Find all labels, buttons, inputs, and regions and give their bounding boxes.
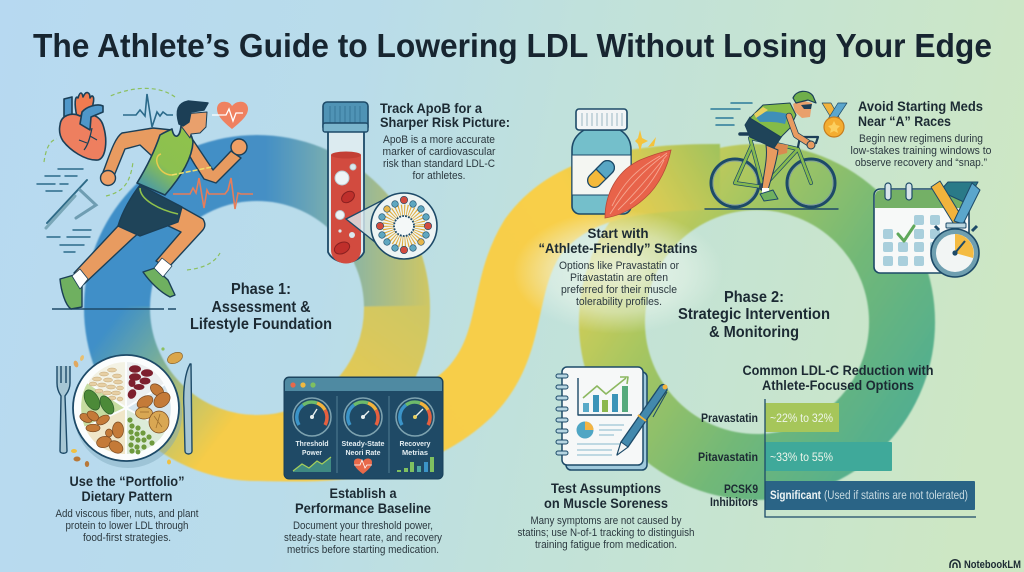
body text: protein to lower LDL through	[66, 520, 188, 532]
body text	[56, 508, 199, 544]
bar labels: PCSK9	[724, 482, 758, 496]
icon: knife	[184, 364, 192, 454]
figure: runner	[60, 101, 247, 309]
panel: athlete-friendly statins	[538, 109, 698, 308]
body text: Options like Pravastatin or	[559, 260, 679, 272]
heading	[70, 473, 184, 504]
body text	[850, 133, 992, 169]
heading: Track ApoB for a	[380, 100, 482, 116]
heading: phase 1: Phase 1:	[231, 281, 291, 298]
title: The Athlete’s Guide to Lowering LDL Without Losing Your Edge	[33, 28, 992, 65]
chart title	[742, 362, 934, 393]
body text: Many symptoms are not caused by	[530, 515, 682, 527]
heading: Use the “Portfolio”	[70, 473, 184, 489]
body text	[559, 260, 679, 308]
panel: performance baseline	[284, 377, 443, 556]
body text: food-first strategies.	[83, 532, 171, 544]
icon: orange ECG line	[173, 178, 253, 209]
heading: Start with	[588, 225, 648, 241]
heading: Sharper Risk Picture:	[380, 114, 510, 130]
bar: pravastatin	[765, 403, 839, 432]
heading: Performance Baseline	[295, 500, 431, 516]
bar: PCSK9 inhibitors: Significant	[770, 490, 821, 502]
bar: pitavastatin: ~33% to 55%	[770, 452, 833, 464]
heading	[295, 485, 431, 516]
panel: avoid meds near races	[705, 91, 992, 277]
bar chart: LDL-C reduction	[698, 362, 976, 517]
icon: anatomical heart	[59, 93, 106, 160]
heading	[858, 98, 983, 129]
body text	[382, 134, 496, 182]
bar: PCSK9 inhibitors	[765, 481, 975, 510]
bar: pravastatin: ~22% to 32%	[770, 413, 833, 425]
body text: risk than standard LDL-C	[383, 158, 495, 170]
heading: Near “A” Races	[858, 113, 951, 129]
body text: Add viscous fiber, nuts, and plant	[56, 508, 199, 520]
body text: steady-state heart rate, and recovery	[284, 532, 442, 544]
heading	[544, 480, 668, 511]
ground line	[52, 308, 176, 310]
body text: Begin new regimens during	[859, 133, 983, 145]
icon: dashboard window: Power	[302, 450, 322, 457]
bar labels: Inhibitors	[710, 495, 758, 509]
body text: ApoB is a more accurate	[383, 134, 495, 146]
icon: notebook with pen	[556, 367, 668, 470]
S-curve path: phase 1 and phase 2 rings	[117, 168, 902, 467]
icon: dashboard window	[284, 377, 443, 479]
heading	[538, 225, 698, 256]
icon: dashboard window: Recovery	[400, 441, 431, 448]
heading: phase 2: Strategic Intervention	[678, 306, 830, 323]
body text	[518, 515, 694, 551]
panel: track ApoB	[323, 100, 510, 264]
icon: dashboard window: Neori Rate	[346, 450, 381, 457]
icon: dashed recovery arrows	[44, 88, 220, 270]
body text: preferred for their muscle	[561, 284, 677, 296]
icon: calendar with stopwatch and ribbon	[874, 181, 980, 277]
heading: phase 2: Phase 2:	[724, 289, 784, 306]
heading: phase 1: Assessment &	[212, 299, 310, 316]
icon: pill bottle	[572, 109, 656, 214]
icon: dashboard window: Steady-State	[342, 441, 385, 448]
body text: observe recovery and “snap.”	[855, 157, 987, 169]
heading: Avoid Starting Meds	[858, 98, 983, 114]
heading: Dietary Pattern	[82, 488, 172, 504]
heading: phase 2: & Monitoring	[709, 324, 799, 341]
icon: fork	[57, 366, 70, 453]
icon: muscle	[605, 150, 671, 218]
body text: low-stakes training windows to	[850, 145, 992, 157]
body text	[284, 520, 442, 556]
panel: muscle soreness	[518, 367, 694, 551]
body text: for athletes.	[412, 170, 466, 182]
body text: Pitavastatin are often	[570, 272, 668, 284]
icon: ECG line dark	[123, 94, 173, 127]
heading: phase 1: Lifestyle Foundation	[190, 316, 332, 333]
illustration: runner with heart	[37, 88, 253, 309]
figure: cyclist	[705, 91, 838, 209]
heading: phase 2	[678, 289, 830, 341]
icon: plate with food	[71, 347, 184, 468]
body text: marker of cardiovascular	[382, 146, 496, 158]
icon: blood test tube	[323, 102, 368, 264]
bar labels: Pitavastatin	[698, 450, 758, 464]
body text: tolerability profiles.	[576, 296, 662, 308]
body text: Document your threshold power,	[293, 520, 433, 532]
body text: metrics before starting medication.	[287, 544, 439, 556]
heading: “Athlete-Friendly” Statins	[538, 240, 698, 256]
body text: training fatigue from medication.	[535, 539, 677, 551]
heading: Test Assumptions	[551, 480, 661, 496]
bar: pitavastatin	[765, 442, 892, 471]
icon: dashboard window: Metrias	[402, 450, 428, 457]
chart title: Athlete-Focused Options	[762, 377, 914, 393]
heading: phase 1	[190, 281, 332, 333]
icon: dashboard window: Threshold	[296, 441, 328, 448]
chart title: Common LDL-C Reduction with	[742, 362, 934, 378]
heading	[380, 100, 510, 130]
panel: portfolio diet	[56, 347, 199, 544]
icon: ApoB particle magnifier	[346, 193, 437, 259]
bar labels: Pravastatin	[701, 411, 758, 425]
body text: statins; use N-of-1 tracking to distinguish	[518, 527, 694, 539]
bar labels	[698, 411, 758, 509]
heading: Establish a	[330, 485, 397, 501]
bar: PCSK9 inhibitors: (Used if statins are not tolerated)	[824, 490, 968, 502]
icon: heart with pulse	[212, 102, 248, 129]
icon: medal	[822, 103, 847, 137]
heading: on Muscle Soreness	[544, 495, 668, 511]
icon: speed silhouette legs	[37, 169, 96, 252]
